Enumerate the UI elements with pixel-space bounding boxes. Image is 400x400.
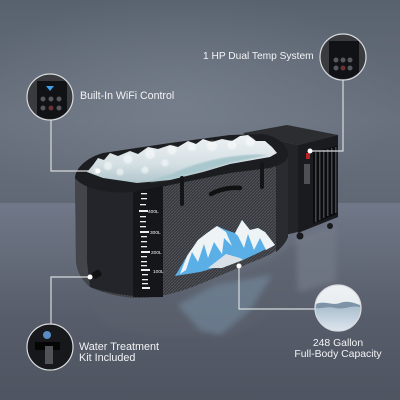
handle xyxy=(211,188,240,194)
background wall xyxy=(0,0,400,204)
chiller label xyxy=(304,164,310,184)
drain valve xyxy=(91,269,102,279)
ice highlights xyxy=(93,138,254,176)
scale ticks and labels: 100L xyxy=(153,269,164,275)
label: water treatment kit: Kit Included xyxy=(79,352,135,364)
tub left edge xyxy=(75,178,90,287)
callout icon: water capacity xyxy=(315,285,361,331)
scale ticks and labels: 400L xyxy=(148,209,159,215)
label: capacity: Full-Body Capacity xyxy=(294,349,382,360)
scale strip xyxy=(133,186,163,297)
scale ticks and labels xyxy=(139,193,164,289)
anchor dot: temp system xyxy=(308,148,312,154)
chiller side xyxy=(243,133,298,240)
floor reflection xyxy=(85,228,337,335)
chiller vent slats xyxy=(315,147,336,222)
label: water treatment kit: Water Treatment xyxy=(79,341,159,353)
callout icon: water treatment kit xyxy=(27,324,73,370)
scale ticks and labels: 200L xyxy=(151,250,162,256)
anchor dot: WiFi xyxy=(96,168,100,174)
tub xyxy=(75,134,288,298)
ice xyxy=(87,135,277,183)
anchor dot: capacity xyxy=(236,264,242,268)
tub right shade xyxy=(276,156,288,252)
callout icon: temp system panel xyxy=(320,34,366,80)
connector: temp system xyxy=(310,80,343,151)
wall glow xyxy=(0,0,400,204)
tub body xyxy=(75,156,288,298)
wheels xyxy=(296,232,304,240)
straps xyxy=(182,164,262,204)
ice bed xyxy=(87,135,277,183)
water pool xyxy=(150,155,268,182)
chiller switch xyxy=(306,153,310,159)
connector: capacity xyxy=(239,266,316,309)
connector: WiFi xyxy=(51,118,98,171)
chiller top xyxy=(243,125,338,145)
connector: water kit xyxy=(51,277,90,325)
callout icon: WiFi control panel xyxy=(27,74,73,120)
chiller unit xyxy=(243,125,338,240)
label: capacity: 248 Gallon xyxy=(313,338,363,349)
background floor xyxy=(0,203,400,400)
label: temp system: 1 HP Dual Temp System xyxy=(203,51,314,62)
label: WiFi control: Built-In WiFi Control xyxy=(80,90,174,102)
mountain graphic xyxy=(175,220,275,276)
tub rim xyxy=(75,134,288,192)
scale ticks and labels: 300L xyxy=(150,230,161,236)
chiller vents xyxy=(313,146,337,224)
chiller front xyxy=(298,135,338,233)
anchor dot: water kit xyxy=(88,274,92,280)
tub dark side panel xyxy=(87,180,163,297)
